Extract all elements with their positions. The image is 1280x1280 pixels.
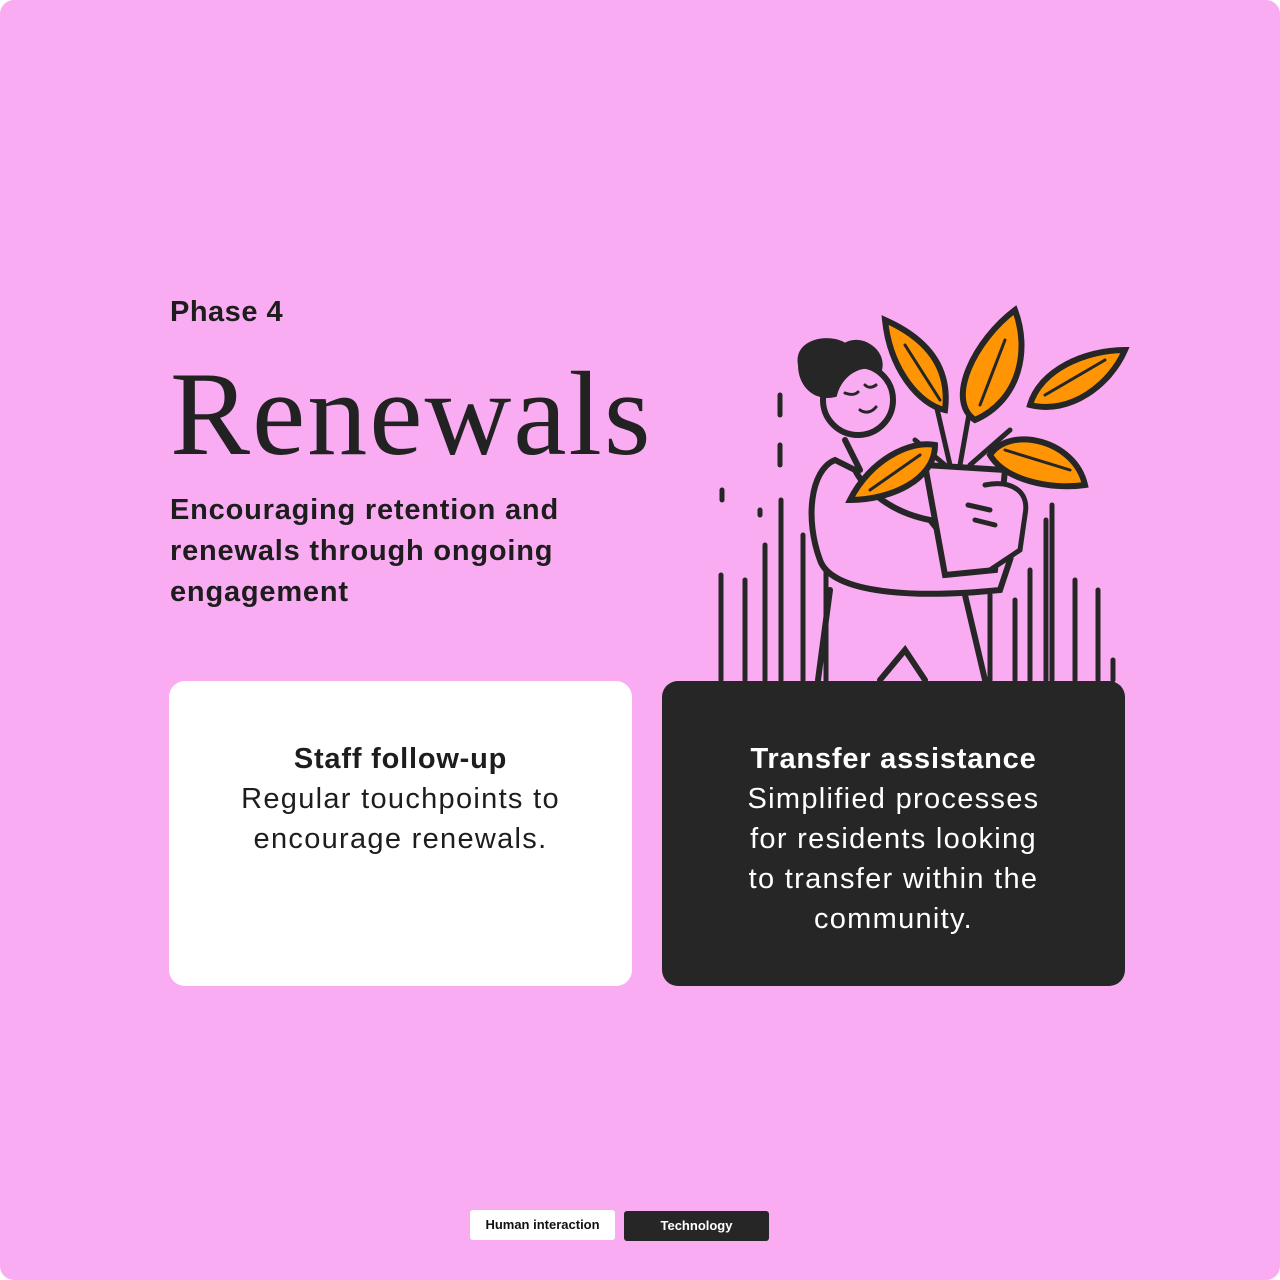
legs — [818, 590, 985, 680]
card heading: Transfer assistance — [750, 743, 1037, 775]
subtitle — [170, 494, 559, 608]
card body — [241, 783, 560, 855]
phase label: Phase 4 — [170, 296, 283, 328]
card: transfer assistance — [662, 681, 1125, 986]
stems — [915, 380, 1010, 465]
subtitle: renewals through ongoing — [170, 535, 553, 567]
leaves — [850, 310, 1125, 500]
card body: for residents looking — [750, 823, 1037, 855]
card: staff follow-up — [169, 681, 632, 986]
card body: encourage renewals. — [254, 823, 547, 855]
legend: human interaction: Human interaction — [485, 1217, 600, 1232]
pot — [925, 465, 1005, 575]
subtitle: Encouraging retention and — [170, 494, 559, 526]
card body: Regular touchpoints to — [241, 783, 560, 815]
hands — [968, 484, 1026, 570]
legend: technology: Technology — [660, 1218, 732, 1233]
card body: Simplified processes — [748, 783, 1039, 815]
card body — [748, 783, 1039, 935]
subtitle: engagement — [170, 576, 349, 608]
card heading: Staff follow-up — [294, 743, 507, 775]
grass lines — [721, 395, 1113, 680]
card body: community. — [814, 903, 973, 935]
legend — [470, 1210, 769, 1241]
title: Renewals — [170, 347, 653, 480]
torso — [812, 460, 1010, 594]
legend: human interaction — [470, 1210, 615, 1240]
neck and head — [845, 440, 860, 470]
hair — [800, 340, 881, 396]
card body: to transfer within the — [749, 863, 1038, 895]
legend: technology — [624, 1211, 769, 1241]
illustration: person holding plant — [718, 305, 1130, 682]
